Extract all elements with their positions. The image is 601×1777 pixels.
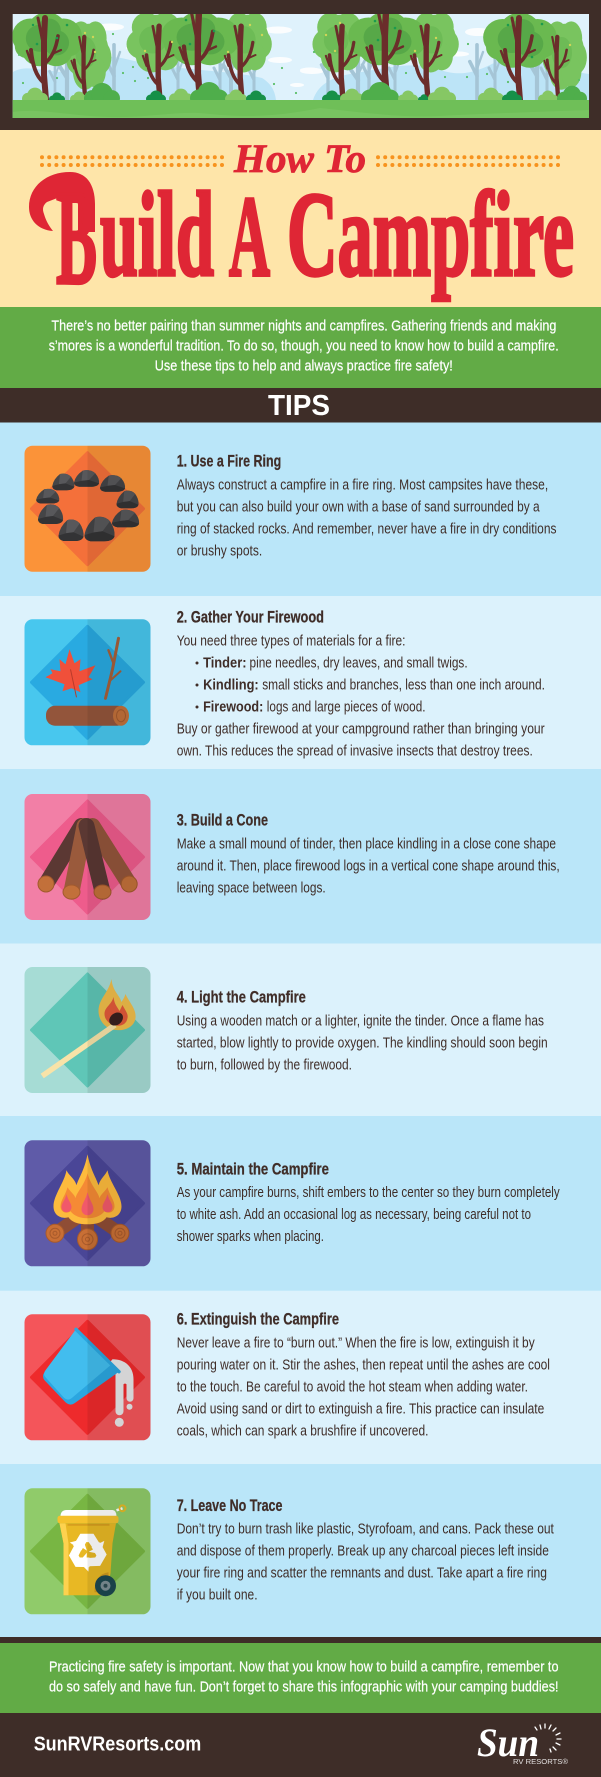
heading: tip 4: 4. Light the Campfire	[177, 989, 306, 1007]
heading: tip 5: 5. Maintain the Campfire	[177, 1160, 329, 1178]
closing message band	[0, 1637, 601, 1713]
title: Build A Campfire: A	[229, 173, 270, 301]
text: tip 5 body	[177, 1184, 560, 1245]
heading: tip 6: 6. Extinguish the Campfire	[177, 1311, 339, 1329]
dotted rule right	[378, 157, 562, 165]
text: tip 7 body: if you built one.	[177, 1587, 258, 1604]
icon: fire ring	[24, 446, 150, 572]
icon: burning match	[24, 967, 150, 1093]
title: Build A Campfire	[29, 163, 574, 313]
text: tip 5 body: shower sparks when placing.	[177, 1228, 324, 1245]
text: tip 2 body	[177, 632, 545, 759]
text: tip 1 body: or brushy spots.	[177, 542, 262, 559]
title: Build A Campfire: B	[56, 163, 97, 313]
text: tip 6 body	[177, 1334, 550, 1439]
list item: firewood: logs and large pieces of wood.	[267, 698, 426, 715]
tips heading band: TIPS	[268, 390, 330, 422]
list item: kindling	[196, 676, 545, 693]
list item: kindling: Kindling:	[203, 676, 259, 693]
header band with forest scene	[0, 0, 601, 130]
tips heading band	[0, 388, 601, 422]
title area	[0, 130, 601, 313]
panel: tip 1	[0, 422, 601, 596]
text: tip 3 body: leaving space between logs.	[177, 879, 326, 896]
text: tip 1 body	[177, 476, 556, 559]
text: tip 7 body	[177, 1521, 555, 1604]
panel: tip 7	[0, 1464, 601, 1637]
title: How To: How To	[233, 136, 366, 181]
panel: tip 5	[0, 1116, 601, 1291]
text: tip 2 body: You need three types of materials for a fire:	[177, 632, 406, 649]
dotted rule left	[42, 157, 226, 165]
intro band: Use these tips to help and always practice fire safety!	[155, 359, 453, 375]
panel: tip 4	[0, 944, 601, 1116]
heading: tip 2: 2. Gather Your Firewood	[177, 609, 324, 627]
website url: SunRVResorts.com	[34, 1734, 201, 1756]
title: Build A Campfire: uild	[100, 168, 214, 302]
intro band	[0, 307, 601, 388]
footer band	[0, 1713, 601, 1777]
list item: firewood: Firewood:	[203, 698, 263, 715]
logo: Sun RV Resorts: RV RESORTS®	[513, 1757, 568, 1766]
panel: tip 3	[0, 769, 601, 944]
icon: log cone	[24, 794, 150, 920]
text: tip 3 body	[177, 835, 560, 896]
icon: pouring bucket	[24, 1314, 150, 1440]
text: tip 4 body: to burn, followed by the firewood.	[177, 1056, 352, 1073]
icon: campfire	[24, 1140, 150, 1266]
list item: tinder	[196, 654, 468, 671]
text: tip 4 body	[177, 1012, 548, 1073]
text: tip 6 body: coals, which can spark a brushfire if uncovered.	[177, 1422, 428, 1439]
panel: tip 6	[0, 1291, 601, 1464]
panel: tip 2	[0, 596, 601, 769]
heading: tip 1: 1. Use a Fire Ring	[177, 453, 281, 471]
list item: tinder: pine needles, dry leaves, and small twigs.	[250, 654, 468, 671]
heading: tip 3: 3. Build a Cone	[177, 812, 268, 830]
icon: firewood materials	[24, 619, 150, 745]
list item: firewood	[196, 698, 426, 715]
recycling symbol	[64, 1534, 110, 1575]
icon: recycling bin	[24, 1488, 150, 1614]
logo: Sun RV Resorts: Sun	[477, 1720, 539, 1765]
heading: tip 7: 7. Leave No Trace	[177, 1497, 282, 1515]
list item: tinder: Tinder:	[203, 654, 246, 671]
